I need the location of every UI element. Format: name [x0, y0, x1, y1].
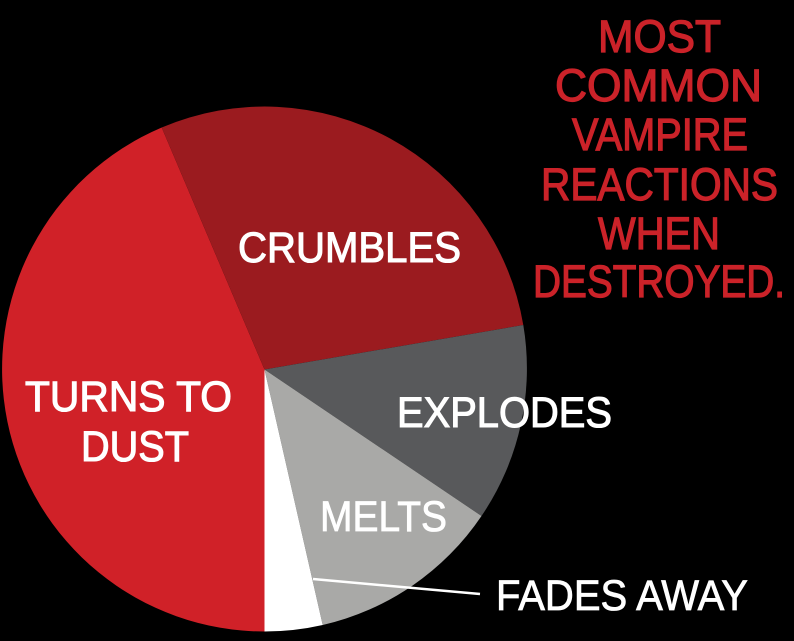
title: VAMPIRE	[572, 109, 748, 160]
slice: melts	[264, 370, 482, 625]
label: fades away: FADES AWAY	[496, 572, 748, 620]
slice: fades away	[264, 370, 323, 632]
title	[533, 11, 785, 307]
label: turns to dust: TURNS TO	[25, 373, 232, 421]
slice: turns to dust	[2, 128, 264, 632]
label: explodes: EXPLODES	[397, 389, 612, 437]
label: turns to dust: DUST	[81, 423, 189, 471]
label: melts: MELTS	[320, 493, 447, 541]
leader line: fades away	[313, 579, 480, 594]
title: MOST	[598, 11, 721, 62]
pie chart	[2, 107, 527, 632]
slice: explodes	[264, 325, 527, 516]
title: WHEN	[598, 208, 720, 259]
label: crumbles: CRUMBLES	[238, 224, 461, 272]
label: turns to dust	[25, 373, 232, 471]
title: COMMON	[555, 60, 762, 111]
slice: crumbles	[162, 107, 523, 370]
